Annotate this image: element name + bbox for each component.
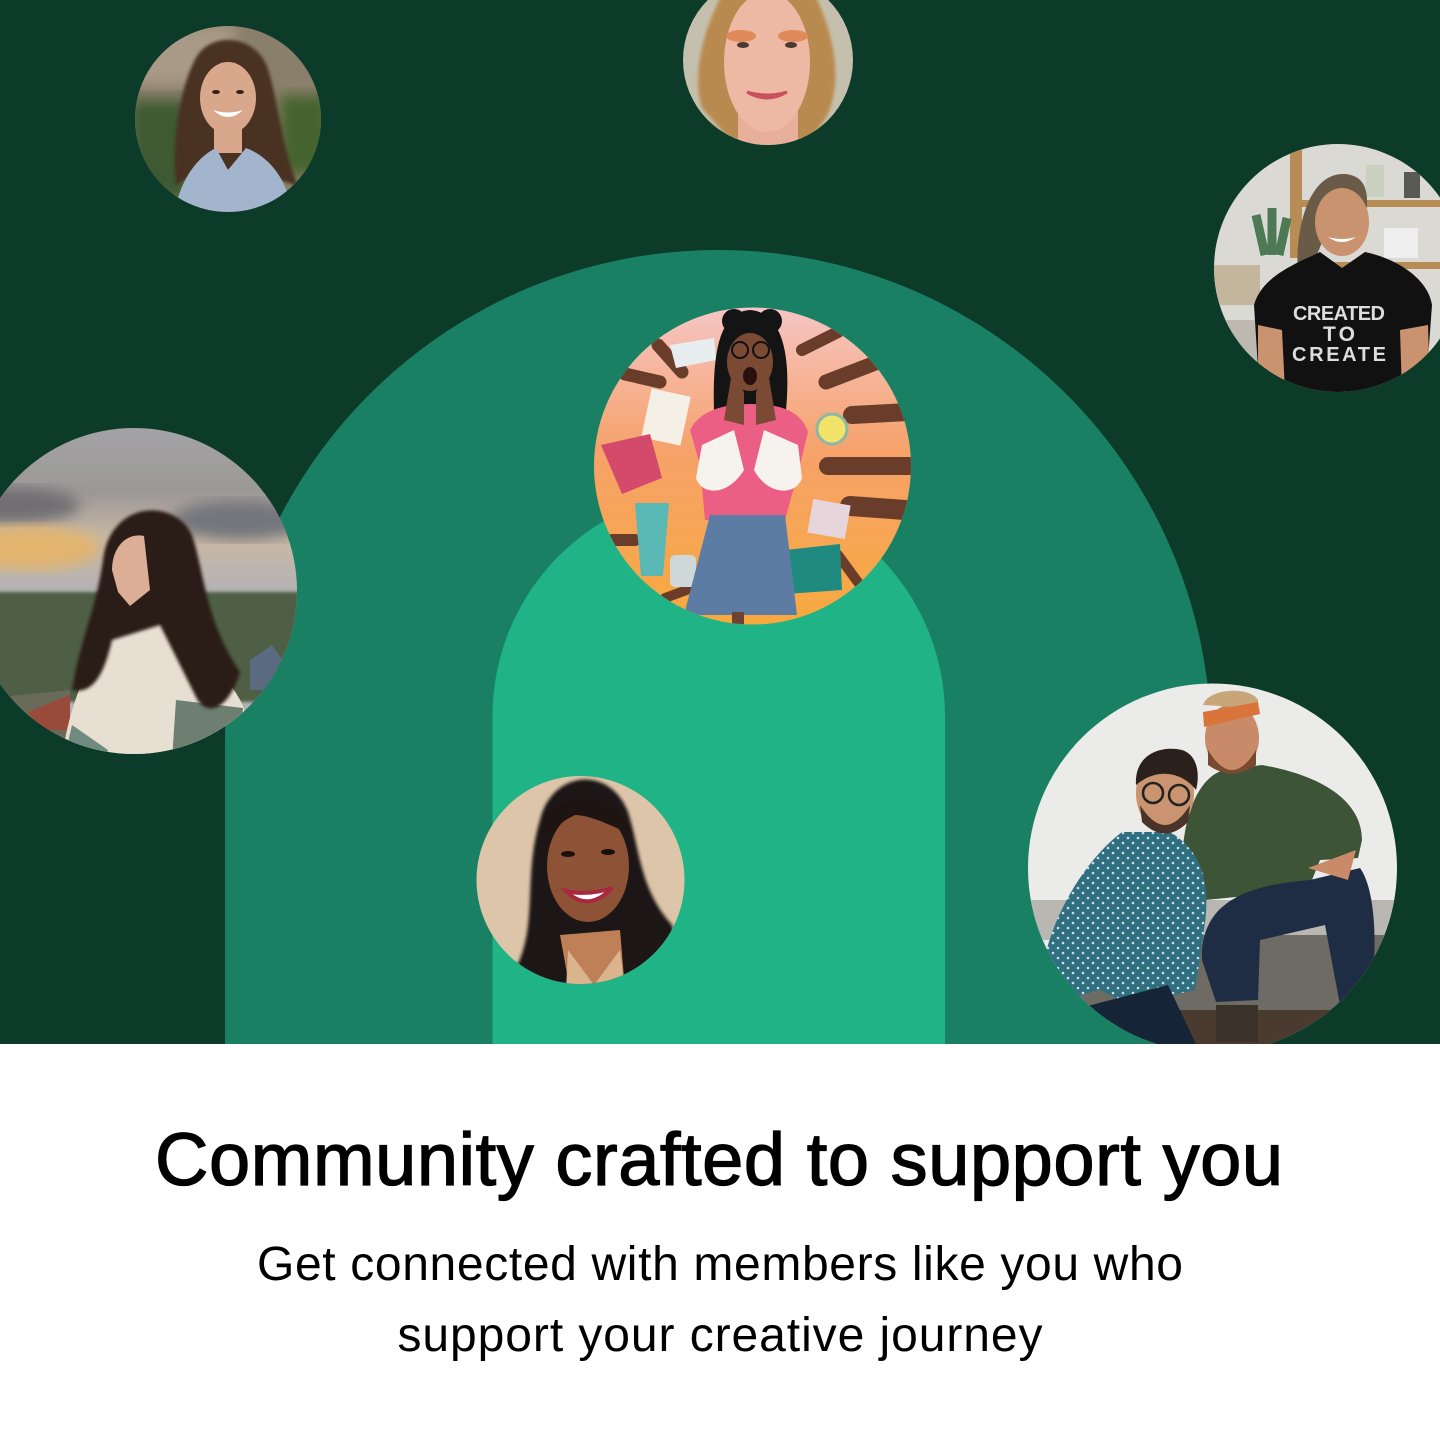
title: Community crafted to support you [155, 1118, 1283, 1201]
photo: woman in Created to Create shirt, right: CREATED [1293, 303, 1385, 325]
outer arch [225, 250, 1211, 1044]
man on the right [1182, 765, 1362, 900]
photo: woman with glitter makeup, top centre [680, 0, 860, 150]
photo: two men sitting against brick wall, bottom right [1026, 682, 1400, 1054]
photo: woman in garden, top left [130, 25, 330, 215]
photo: woman in Created to Create shirt, right: TO [1323, 323, 1355, 346]
panel: dark green background [0, 0, 1440, 1044]
photo: woman with long dark hair at sunset, left [0, 426, 310, 760]
subtitle: support your creative journey [398, 1309, 1042, 1362]
photo: woman in Created to Create shirt, right: CREATE [1292, 344, 1386, 366]
hands [612, 332, 912, 598]
man on the left [1042, 832, 1206, 1005]
held items [641, 388, 691, 446]
inner arch [492, 490, 945, 1044]
photo: woman surrounded by hands and products, centre [590, 305, 915, 632]
girl [714, 310, 787, 420]
subtitle [257, 1238, 1183, 1362]
subtitle: Get connected with members like you who [257, 1238, 1183, 1291]
photo: woman in Created to Create shirt, right [1210, 143, 1440, 400]
photo: smiling woman, bottom centre [474, 772, 688, 990]
